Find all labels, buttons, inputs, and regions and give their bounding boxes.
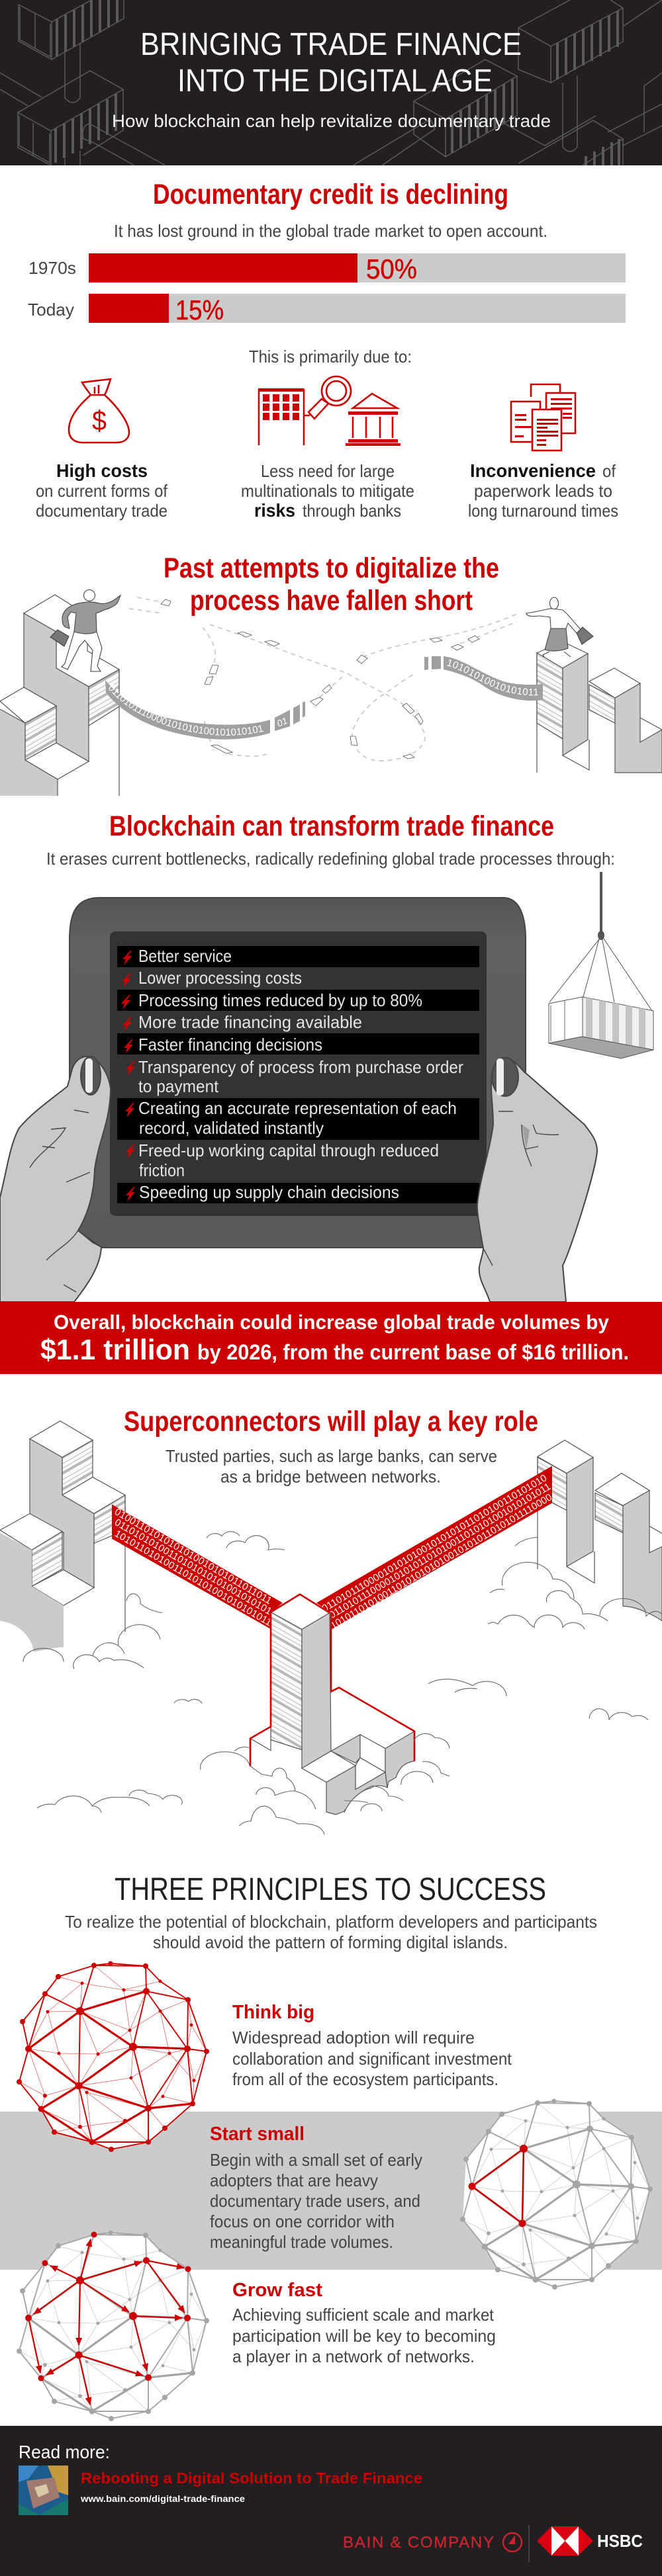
- heading: Blockchain can transform trade finance: [109, 810, 554, 842]
- person: man on left tower: [50, 590, 120, 671]
- grey band: [0, 2112, 662, 2270]
- text: high costs: on current forms of: [36, 481, 168, 501]
- principle: think big: [17, 1961, 512, 2152]
- principle: start small: Begin with a small set of early: [210, 2150, 422, 2170]
- logo: HSBC: HSBC: [597, 2531, 643, 2551]
- report cover thumbnail: [19, 2466, 68, 2515]
- left towers: [0, 595, 119, 796]
- principle: start small: focus on one corridor with: [210, 2211, 395, 2231]
- text: inconvenience of paperwork: long turnaround times: [468, 501, 618, 521]
- bar chart: Today: [28, 300, 74, 320]
- principle: think big: collaboration and significant investment: [232, 2049, 512, 2069]
- icon: money bag: $: [92, 405, 107, 436]
- principle: start small: meaningful trade volumes.: [210, 2232, 393, 2252]
- intro text: It erases current bottlenecks, radically redefining global trade processes through:: [46, 849, 615, 869]
- list of benefits: Speeding up supply chain decisions: [139, 1182, 399, 1202]
- left red binary band: 10101101010011010101001010101011: [113, 1528, 273, 1629]
- text: less need for multinationals: risks: [254, 500, 295, 521]
- right binary ribbon: 10101010010101011: [447, 660, 538, 696]
- list of benefits: to payment: [138, 1076, 219, 1096]
- icon: grey network sphere with red triangle: [460, 2098, 653, 2290]
- principle: start small: [210, 2098, 653, 2290]
- text: inconvenience of paperwork: paperwork leads to: [474, 481, 612, 501]
- icon: building, magnifier and bank: [258, 376, 401, 446]
- panel: past attempts: [0, 552, 662, 796]
- list of benefits: More trade financing available: [138, 1012, 362, 1032]
- intro text: should avoid the pattern of forming digital islands.: [153, 1932, 508, 1952]
- red outline of superconnector tower: [250, 1594, 414, 1766]
- bar chart: 50%: [366, 253, 417, 284]
- intro text: To realize the potential of blockchain, platform developers and participants: [65, 1912, 597, 1932]
- list of benefits: Faster financing decisions: [138, 1035, 322, 1054]
- heading: Documentary credit is declining: [153, 179, 508, 210]
- intro text: [65, 1912, 597, 1952]
- right red binary band: 01101011100001010101101010011010101001010101011: [327, 1481, 553, 1621]
- text: less need for multinationals: Less need for large: [261, 461, 395, 481]
- heading: Superconnectors will play a key role: [124, 1406, 538, 1438]
- logo: HSBC: [537, 2526, 643, 2555]
- principle: start small: adopters that are heavy: [210, 2170, 378, 2190]
- screen: [110, 931, 487, 1216]
- bar chart: 1970s: [28, 258, 76, 278]
- principle: think big: Widespread adoption will require: [232, 2028, 475, 2047]
- callout: red banner: [0, 1302, 662, 1374]
- striped rows: [117, 946, 479, 1203]
- left binary ribbon: 01: [275, 715, 289, 729]
- container hanging from crane: [549, 872, 653, 1058]
- left towers: [0, 1421, 125, 1652]
- list of benefits: Processing times reduced by up to 80%: [138, 990, 422, 1010]
- left red binary band: 01101010100110101010101001010101: [113, 1517, 273, 1617]
- read more label: Read more:: [19, 2442, 110, 2462]
- list of benefits: Better service: [138, 946, 232, 966]
- icon: money bag: [69, 379, 129, 443]
- right hand: [477, 1058, 597, 1302]
- text: high costs: documentary trade: [36, 501, 167, 521]
- bar chart: 15%: [175, 294, 224, 325]
- left binary ribbon: 0110101110000101010100101010101: [109, 685, 263, 736]
- principle: think big: from all of the ecosystem participants.: [232, 2069, 498, 2089]
- title: [140, 27, 522, 99]
- panel: footer: [0, 2426, 662, 2576]
- list of benefits: [121, 946, 463, 1202]
- right red binary band: 10101101010011010101010100101010110101011110000: [328, 1492, 554, 1631]
- list of benefits: Creating an accurate representation of each: [138, 1098, 457, 1118]
- principle: grow fast: participation will be key to becoming: [232, 2326, 496, 2346]
- callout: red banner: Overall, blockchain could increase global trade volumes by: [54, 1310, 610, 1334]
- tablet: [70, 898, 526, 1250]
- right red binary band: 01101011100001010101001010101011010100110101010: [320, 1473, 549, 1614]
- text: high costs: High costs: [56, 460, 148, 481]
- title: INTO THE DIGITAL AGE: [177, 64, 493, 99]
- header background pattern of containers: [0, 0, 662, 165]
- list of benefits: record, validated instantly: [139, 1118, 324, 1138]
- right towers: [538, 1440, 662, 1621]
- principle: grow fast: Grow fast: [232, 2280, 322, 2301]
- list of benefits: Transparency of process from purchase order: [138, 1057, 463, 1077]
- panel: blockchain can transform trade finance: [0, 810, 653, 1302]
- text: inconvenience of paperwork: Inconvenience: [470, 460, 596, 481]
- principle: think big: Think big: [232, 2002, 314, 2023]
- text: less need for multinationals: through banks: [303, 501, 401, 521]
- list of benefits: Lower processing costs: [138, 968, 302, 988]
- text: primarily due to: This is primarily due to:: [249, 347, 412, 366]
- subtitle: How blockchain can help revitalize documentary trade: [112, 111, 551, 131]
- principle: grow fast: a player in a network of networks.: [232, 2346, 475, 2366]
- report url: www.bain.com/digital-trade-finance: [80, 2493, 245, 2504]
- callout: red banner: by 2026, from the current base of $16 trillion.: [197, 1340, 629, 1364]
- person: woman on right tower: [526, 597, 593, 657]
- panel: header: [0, 0, 662, 165]
- principle: grow fast: [17, 2231, 496, 2421]
- intro text: It has lost ground in the global trade market to open account.: [114, 221, 547, 241]
- principle: grow fast: Achieving sufficient scale and market: [232, 2305, 495, 2325]
- heading: process have fallen short: [190, 585, 473, 617]
- icon: grey network sphere with red arrows: [17, 2231, 209, 2421]
- clouds: [23, 1531, 662, 1834]
- callout: red banner: $1.1 trillion: [40, 1334, 190, 1366]
- heading: Past attempts to digitalize the: [164, 552, 499, 584]
- text: inconvenience of paperwork: of: [602, 461, 616, 481]
- left red binary band: 01001101010101010010101011011011: [113, 1506, 273, 1607]
- principle: start small: Start small: [210, 2124, 305, 2145]
- bar chart: [28, 253, 626, 325]
- text: less need for multinationals: multinationals to mitigate: [241, 481, 414, 501]
- icon: red network sphere: [17, 1961, 209, 2152]
- title: BRINGING TRADE FINANCE: [140, 27, 522, 62]
- icon: paper documents: [511, 384, 575, 451]
- text: high costs: [36, 460, 168, 521]
- heading: [164, 552, 499, 617]
- panel: superconnectors: [0, 1406, 662, 1834]
- intro text: Trusted parties, such as large banks, can serve: [166, 1446, 497, 1466]
- paper documents: [161, 599, 479, 759]
- list of benefits: friction: [139, 1160, 185, 1180]
- central superconnector tower: [250, 1594, 414, 1815]
- text: inconvenience of paperwork: [468, 460, 618, 521]
- dashed paper trails: [129, 597, 517, 761]
- heading: THREE PRINCIPLES TO SUCCESS: [115, 1872, 546, 1907]
- right towers: [537, 642, 662, 773]
- panel: three principles: [0, 1872, 662, 2421]
- principle: start small: documentary trade users, and: [210, 2191, 420, 2211]
- text: less need for multinationals: [241, 461, 414, 521]
- panel: documentary credit is declining: [28, 179, 626, 521]
- list of benefits: Freed-up working capital through reduced: [138, 1140, 439, 1160]
- intro text: [166, 1446, 497, 1486]
- intro text: as a bridge between networks.: [220, 1467, 441, 1486]
- report title: Rebooting a Digital Solution to Trade Finance: [81, 2469, 422, 2487]
- left hand: [0, 1056, 111, 1302]
- logo: Bain & Company: BAIN & COMPANY: [343, 2534, 494, 2552]
